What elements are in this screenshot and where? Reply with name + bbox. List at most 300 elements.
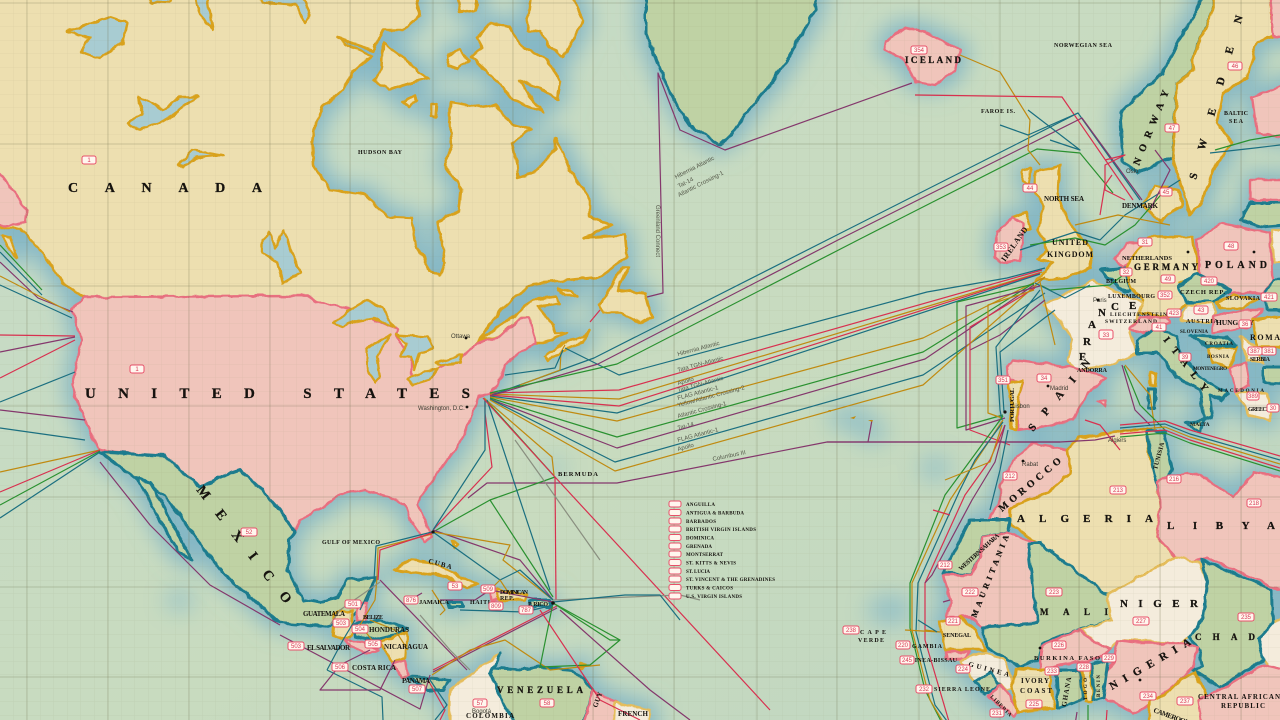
Europe labels: PORTUGAL [1009,387,1016,422]
Europe labels: NETHERLANDS [1122,255,1172,262]
country code shields: 237 [1180,699,1191,705]
Central America and Caribbean labels: EL SALVADOR [307,644,351,652]
Sweden [1173,0,1273,215]
country code shields: 34 [1041,376,1048,382]
Albania and Montenegro [1230,362,1250,392]
country code shields: 221 [948,619,959,625]
country code shields: 49 [1165,277,1172,283]
Europe labels: ROMA [1250,333,1280,342]
cable name captions: Tata TGN-Atlantic [677,356,724,374]
cable name captions: Columbus III [712,450,747,463]
Sudan fragment [1258,605,1280,700]
Europe labels: SWEDEN [1187,14,1246,181]
Suriname and French Guiana [613,703,650,720]
country code shields: 33 [1103,333,1110,339]
country code shields: 57 [477,701,484,707]
Central America and Caribbean labels: HONDURAS [369,626,409,634]
Africa labels: SIERRA LEONE [934,687,990,693]
Europe labels: Paris [1093,298,1107,304]
country code shields: 421 [1264,295,1275,301]
European cables [970,135,1280,430]
country code shields: 216 [1169,477,1180,483]
country code shields: 354 [914,48,925,54]
country code shields: 43 [1198,308,1205,314]
Belgium [1100,268,1130,290]
Africa labels: MALTA [1190,422,1210,428]
Denmark [1143,185,1182,222]
country code shields: 44 [1027,186,1034,192]
Austria [1180,303,1217,323]
Europe labels: Madrid [1050,386,1068,392]
Africa labels: MOROCCO [997,456,1064,514]
Trinidad [580,663,585,669]
Cameroon [1148,672,1205,720]
Vancouver Island [2,235,18,258]
cable name captions: Hibernia Atlantic [677,341,720,358]
United States to Caribbean cables [360,398,770,710]
northern lakes [146,0,310,30]
Norway [1120,0,1213,173]
Europe labels: Oslo [1126,169,1139,175]
Central America and Caribbean labels: COLOMBIA [466,712,514,720]
Finland [1252,0,1280,140]
island index list [669,501,775,600]
Scotland islands [1022,168,1030,185]
Mexico [100,452,377,627]
country code shields: 809 [491,604,502,610]
Central America and Caribbean labels: NICARAGUA [384,643,428,651]
Alaska panhandle [0,140,27,226]
Africa labels: Algiers [1108,438,1126,444]
Cuba [393,560,478,588]
Lake Athabasca [178,150,223,168]
Costa Rica [393,660,408,678]
Poland [1197,223,1273,293]
list of island names: MONTSERRAT [686,553,724,558]
country code shields: 229 [1104,656,1115,662]
Guinea [960,652,1015,690]
country code shields: 505 [368,642,379,648]
Atlantic labels: CAPE [860,630,886,636]
Dominican Republic [497,589,527,600]
Pacific cables [0,245,280,625]
Serbia [1240,337,1263,363]
list of island names: U.S. VIRGIN ISLANDS [686,595,742,600]
Africa labels: COAST [1020,687,1052,695]
Europe labels: DENMARK [1122,202,1159,210]
country code shields: 232 [919,687,930,693]
Lake Superior [333,300,393,328]
Liberia [988,685,1018,716]
Europe labels: ANDORRA [1077,368,1108,374]
west Africa cables [905,416,1107,720]
country code shields: 420 [1204,279,1215,285]
country code shields: 52 [246,530,253,536]
list of island names: ST. LUCIA [686,570,710,575]
country code shields: 41 [1156,325,1163,331]
country code shields: 224 [958,667,969,673]
cable name captions: Greenland Connect [654,205,660,257]
Ireland [995,217,1023,263]
list of island names: ST. VINCENT & THE GRENADINES [686,578,775,583]
Africa labels: REPUBLIC [1221,702,1265,710]
Europe labels: E [1129,300,1136,312]
Lake Erie [407,368,438,385]
ocean shading around islands [166,406,949,624]
Morocco [987,443,1070,520]
country code shields: 58 [544,701,551,707]
Portugal [1008,380,1023,430]
cable name captions: Hibernia Atlantic [674,156,716,181]
Central America and Caribbean labels: DOMINICAN [500,590,529,596]
United States [72,296,536,542]
Slovakia [1217,295,1257,308]
country code shields: 47 [1169,126,1176,132]
country code shields: 506 [335,665,346,671]
Iceland [885,28,960,85]
North America labels: Washington, D.C. [418,406,465,412]
Africa labels: MAURITANIA [970,534,1011,619]
Central America and Caribbean labels: REP. [500,596,514,602]
Lake Michigan [367,335,390,383]
Europe labels: SERBIA [1250,357,1271,363]
list of island names: ANTIGUA & BARBUDA [686,512,744,516]
Iberia loop cables [827,284,1120,450]
Jamaica [448,602,463,607]
list of island names [686,503,775,600]
list of island names: GRENADA [686,545,712,550]
transatlantic cables [468,113,1142,498]
Africa labels: Rabat [1022,462,1038,468]
Africa labels: TOGO [1084,678,1089,700]
Africa labels: TUNISIA [1152,441,1166,471]
Colombia [450,653,527,720]
Africa labels: GUINEA [967,660,1010,679]
Europe labels: CROATIA [1205,342,1233,347]
Africa labels: BURKINA FASO [1034,655,1100,662]
country code shields: 1 [135,367,139,373]
Lake Huron [395,335,433,370]
El Salvador [345,640,378,654]
Europe labels: SEA [1229,119,1244,125]
Europe labels: BELGIUM [1106,279,1136,285]
country code shields: 503 [291,644,302,650]
Central America and Caribbean labels [303,557,649,720]
country code shields: 423 [1169,311,1180,317]
country code shields: 220 [898,643,909,649]
Lake Winnipeg [262,230,300,283]
Canada [0,0,627,390]
country code shields: 238 [846,628,857,634]
North America labels: CANADA [68,181,263,196]
Northern Ireland [1013,212,1030,232]
Europe labels: NORWAY [1132,88,1172,167]
cable name captions: Apollo [677,443,695,453]
North America labels: MEXICO [193,483,294,607]
country code shields: 235 [1241,615,1252,621]
Puerto Rico [530,600,550,607]
country code shields: 787 [521,608,532,614]
Central America and Caribbean labels: Bogotá [472,709,492,715]
country code shields: 30 [1270,406,1277,412]
Central America and Caribbean labels: GUY [591,691,604,709]
Central America and Caribbean labels: FRENCH [618,710,649,718]
Nigeria [1103,640,1197,713]
North America labels: HUDSON BAY [358,150,403,156]
country code shields: 381 [1264,349,1275,355]
country code shields: 212 [1005,474,1016,480]
Ivory Coast [1012,668,1056,712]
country code shields: 225 [1029,702,1040,708]
cable name captions [654,156,747,463]
Western Sahara [943,520,1010,575]
Central America and Caribbean labels: VENEZUELA [497,685,584,695]
Switzerland [1130,317,1170,333]
Central America and Caribbean labels: JAMAICA [419,599,449,606]
Europe labels: ITALY [1161,335,1210,394]
Belarus [1272,230,1280,262]
Central America and Caribbean labels: HAITI [470,600,491,606]
small Arctic island [447,50,468,68]
Atlantic labels: NORWEGIAN SEA [1054,43,1113,49]
list of island names: DOMINICA [686,536,714,542]
country code shields: 228 [1079,665,1090,671]
North America labels [68,150,598,607]
Caribbean and Central America cables [280,580,700,720]
Atlantic labels: ICELAND [905,55,962,65]
list of island names: BRITISH VIRGIN ISLANDS [686,528,756,533]
Europe labels: KINGDOM [1047,250,1093,259]
Atlantic labels: FAROE IS. [981,109,1016,115]
Guatemala [333,610,353,640]
capital city dots and Azores islets [431,251,1255,681]
cable name captions: FLAG Atlantic-1 [677,427,720,444]
list of island names: ST. KITTS & NEVIS [686,562,736,566]
country code shields: 222 [965,590,976,596]
Europe labels: LIECHTENSTEIN [1110,312,1167,318]
Belize [357,603,367,622]
Greenland [646,0,820,145]
Newfoundland [600,267,652,323]
Europe labels: SLOVENIA [1180,330,1208,335]
Bulgaria [1263,367,1280,385]
Czech Republic [1178,273,1230,302]
Europe labels: MONTENEGRO [1193,367,1227,372]
north Atlantic cables [647,55,1133,297]
country code shields: 213 [1113,488,1124,494]
Great Slave Lake [127,97,198,130]
country code shields: 218 [1249,501,1260,507]
Africa labels: CHAD [1195,632,1256,642]
Europe labels: MACEDONIA [1218,389,1264,394]
Honduras [353,620,407,640]
Guyana [575,690,617,720]
Central America and Caribbean labels: P. RICO [528,602,548,608]
country code shields: 227 [1136,619,1147,625]
Bahamas reef [452,540,458,548]
Venezuela [490,653,593,720]
country code shields: 234 [1143,694,1154,700]
Greece [1236,393,1270,420]
Europe labels: SLOVAKIA [1226,296,1261,302]
Mali [983,543,1113,667]
Italy [1137,327,1227,420]
Baffin Island [470,23,560,112]
country code shields: 46 [1232,64,1239,70]
Europe labels: LUXEMBOURG [1108,294,1155,300]
Africa labels: SENEGAL [943,633,971,639]
Europe labels: CZECH REP. [1180,289,1225,296]
Lake Ontario [435,355,462,365]
Niger [1082,557,1207,650]
Sierra Leone [975,672,1000,695]
France [1043,280,1143,370]
Central America and Caribbean labels: COSTA RICA [352,664,396,672]
Baltic states [1250,180,1280,200]
Europe labels: A [1088,319,1096,331]
Hungary [1213,310,1263,333]
Europe labels: IRELAND [999,225,1030,263]
cable name captions: Atlantic Crossing-1 [677,170,725,199]
Chad [1190,560,1273,687]
country code shields: 352 [1160,293,1171,299]
Senegal [940,617,985,650]
Central African Republic [1198,665,1280,720]
country code shields: 509 [483,587,494,593]
cable name captions: FLAG Atlantic-1 [677,385,720,402]
country code shields: 223 [1049,590,1060,596]
Africa labels: GUINEA-BISSAU [905,658,958,664]
Coats and Mansel islands [402,95,437,117]
Germany [1127,237,1200,317]
Central America and Caribbean labels: PANAMA [402,677,430,685]
Europe labels: R [1083,336,1092,348]
Mauritania [943,533,1037,627]
Nicaragua [380,632,407,663]
Sardinia [1148,389,1155,408]
Ghana [1056,670,1083,708]
Burkina Faso [1040,630,1110,672]
Africa labels: MALI [1040,607,1108,617]
country code shields: 504 [355,627,366,633]
Europe labels: C [1111,301,1119,313]
Benin [1092,660,1108,700]
Lithuania [1240,203,1280,227]
Africa labels: NIGER [1120,598,1199,610]
country code shields: 48 [1228,244,1235,250]
Tunisia [1147,430,1172,490]
Atlantic labels [858,43,1113,644]
Prince Edward Island strip [558,288,578,296]
Africa labels: GHANA [1060,676,1073,707]
Europe labels: UNITED [1052,238,1088,247]
Europe labels: BALTIC [1224,111,1248,117]
Africa labels: LIBYA [1167,520,1275,532]
Romania [1253,313,1280,347]
country code shields: 1 [87,158,91,164]
Southampton Island [375,43,428,90]
country code shields: 36 [1242,322,1249,328]
inland lakes [67,0,462,385]
cable name captions: Yellow/Atlantic Crossing-2 [677,385,746,409]
Guinea-Bissau [945,652,970,658]
country code shields: 226 [1054,643,1065,649]
country code shields: 45 [1163,190,1170,196]
Africa labels: BENIN [1097,675,1102,697]
Bosnia [1207,347,1237,367]
North America labels: BERMUDA [558,471,598,478]
cable name captions: Tat-14 [677,177,695,190]
Algeria [1010,428,1175,595]
country code shields: 351 [998,378,1009,384]
Arctic island north [527,0,583,57]
Baja California [137,478,192,560]
country code shields: 231 [992,711,1003,717]
Haiti [490,590,499,600]
Africa labels: LIBERIA [989,694,1013,718]
Panama [408,677,450,690]
Corsica [1151,372,1156,386]
North America labels: UNITED STATES [85,386,470,402]
country code shields: 31 [1142,240,1149,246]
Croatia [1190,335,1236,346]
Africa labels: GAMBIA [912,644,943,650]
Mediterranean trunk [1120,421,1280,471]
cable name captions: Atlantic Crossing-1 [677,401,728,420]
country code shields: 212 [940,563,951,569]
list of island names: ANGUILLA [686,503,715,508]
Atlantic labels: VERDE [858,638,884,644]
list of island names: TURKS & CAICOS [686,586,733,592]
Togo [1081,665,1093,702]
Africa labels: IVORY [1021,677,1049,685]
country code shields: 507 [412,687,423,693]
cable name captions: Apollo [677,377,695,387]
Europe labels: POLAND [1205,260,1267,271]
Africa labels [905,422,1280,720]
Europe labels: AUSTRIA [1186,319,1219,325]
Europe labels: F [1079,351,1086,363]
Africa labels: ALGERIA [1017,513,1153,525]
Europe labels: BOSNIA [1207,355,1229,360]
country code shields: 245 [902,658,913,664]
Africa labels: WESTERN SAHARA [958,532,1001,572]
cable name captions: Tat-14 [677,422,695,432]
Europe labels: GERMANY [1134,262,1198,272]
Great Bear Lake [67,17,128,58]
Europe labels: GREECE [1248,407,1270,413]
Africa labels: CENTRAL AFRICAN [1198,693,1280,701]
Sicily [1185,420,1204,432]
list of country codes [669,501,681,599]
country code shields: 387 [1250,349,1261,355]
Europe labels [999,14,1280,434]
Arctic island top [455,0,477,12]
Nova Scotia [545,330,590,362]
country code shields: 389 [1248,394,1259,400]
Spain [1007,360,1107,430]
country code shields: 32 [1123,270,1130,276]
country code shields: 501 [348,602,359,608]
Africa labels: NIGERIA [1108,636,1193,693]
country code shields: 503 [336,621,347,627]
country code shields: 876 [406,598,417,604]
Europe labels: Lisbon [1012,404,1030,410]
United Kingdom [1035,166,1093,280]
country code shields: 353 [996,245,1007,251]
North America labels: Ottawa [451,334,471,340]
country code shields: 233 [1047,669,1058,675]
